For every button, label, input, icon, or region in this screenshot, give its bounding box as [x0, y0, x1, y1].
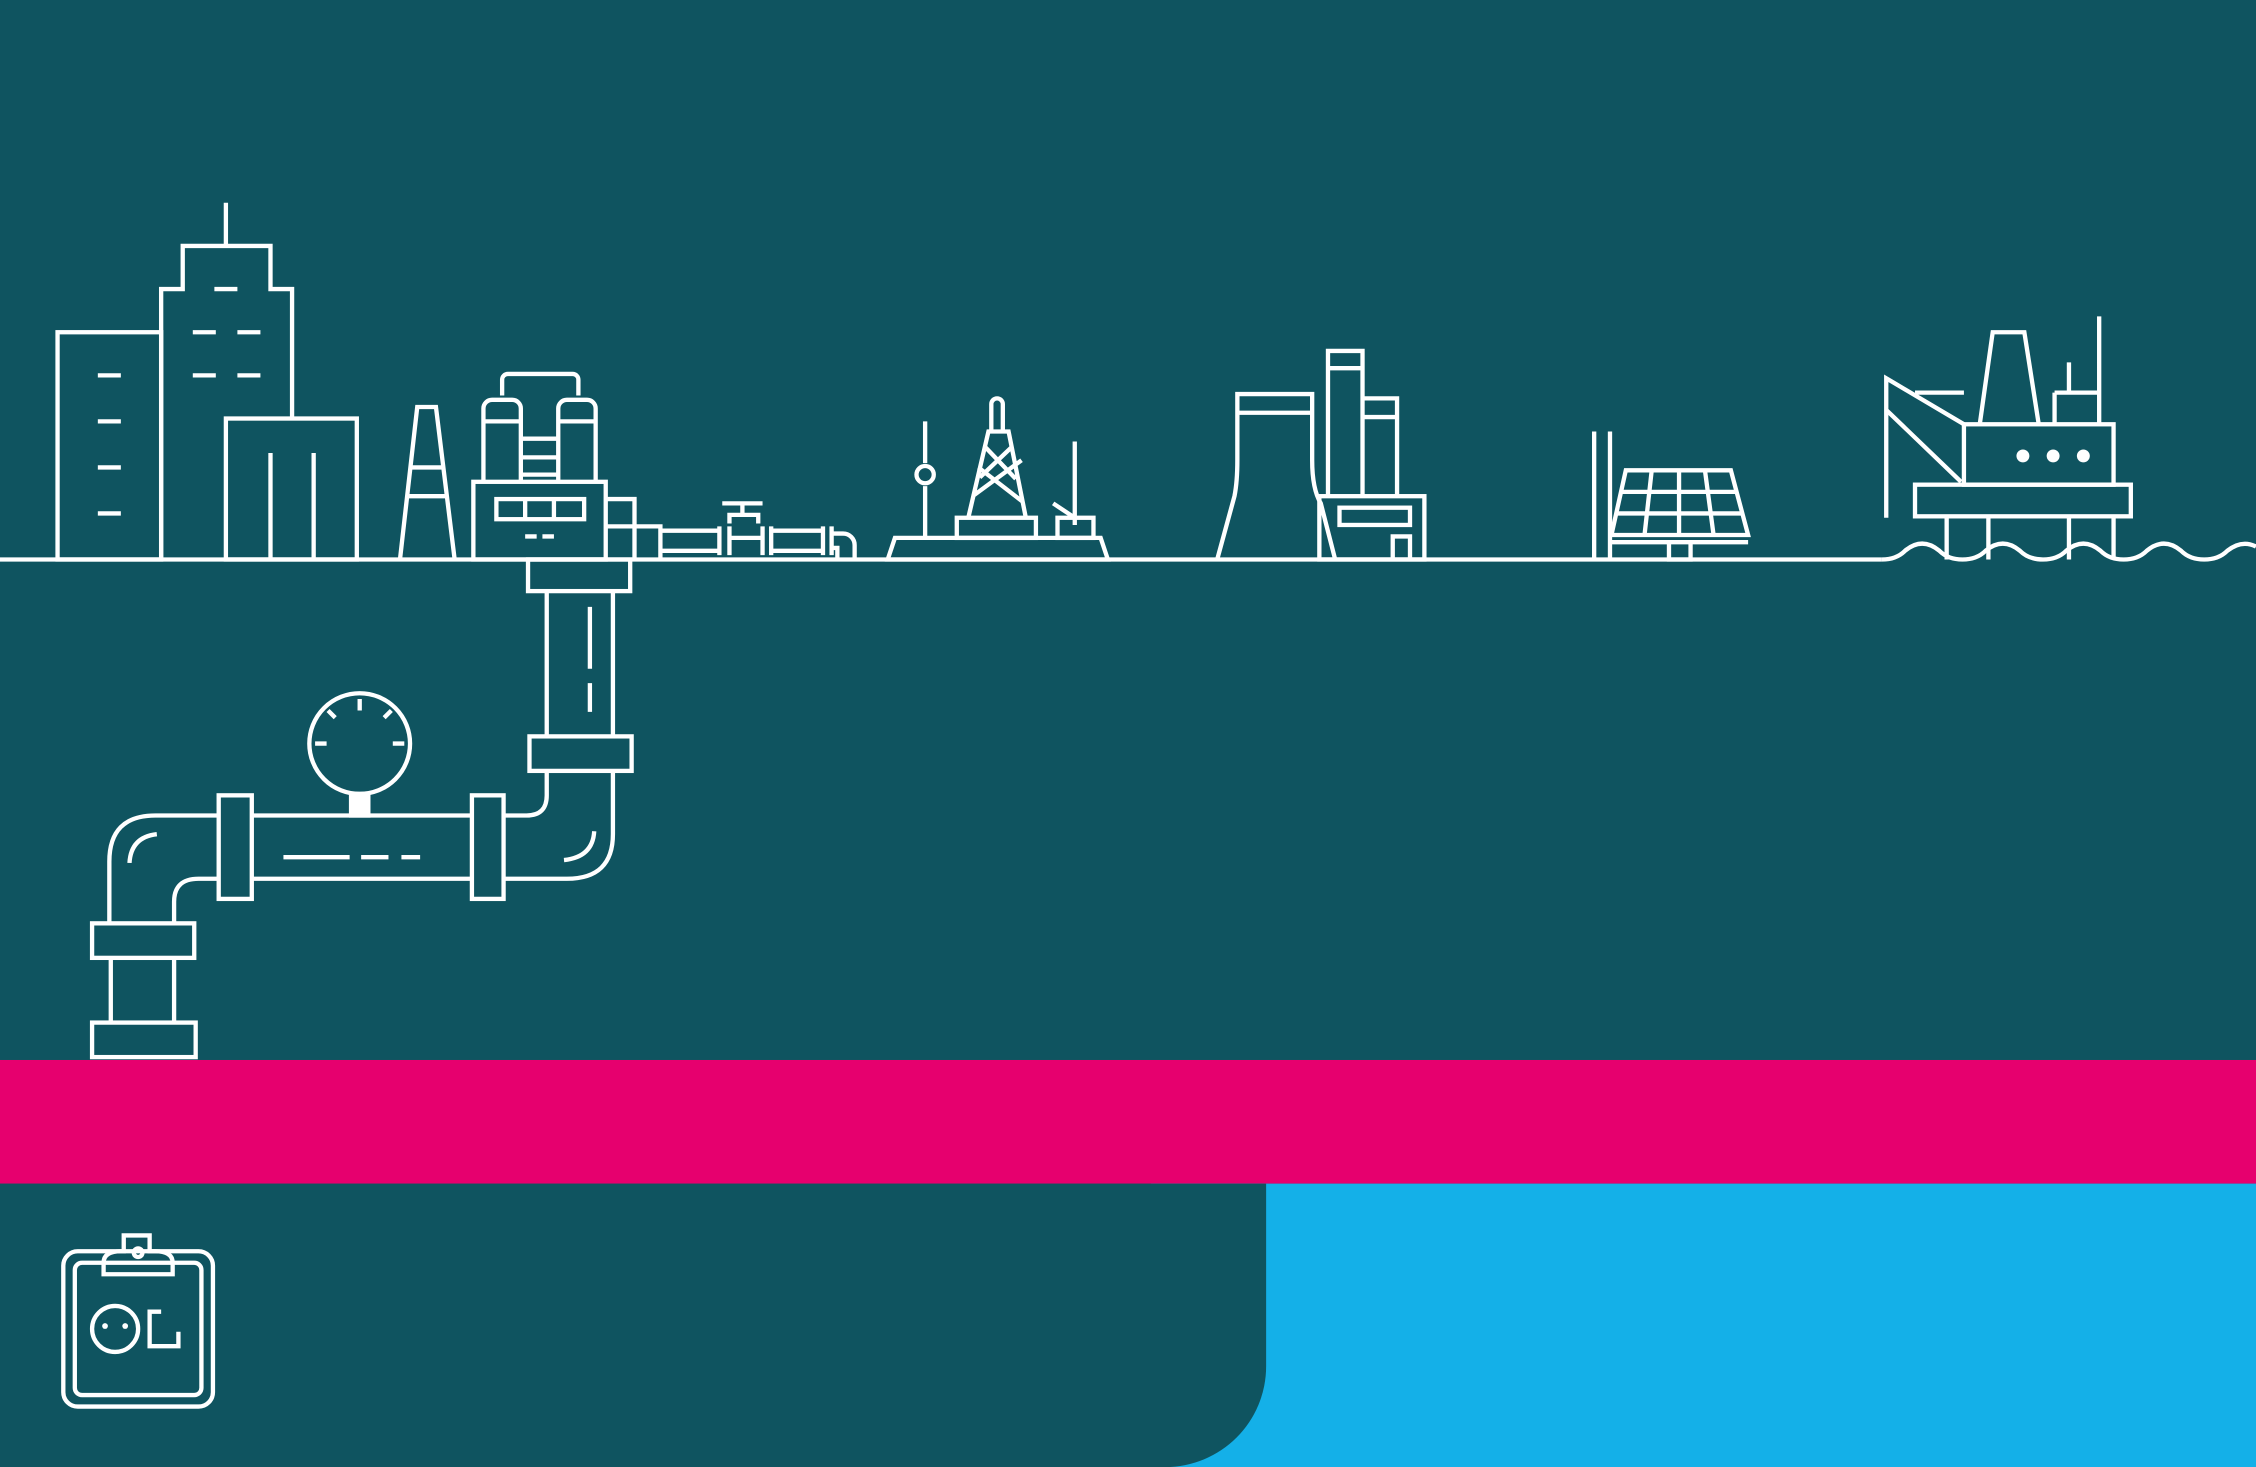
refinery	[473, 374, 855, 559]
oil rig	[888, 398, 1108, 559]
solar panel	[1594, 431, 1748, 559]
offshore platform	[1882, 316, 2256, 559]
blue panel	[1151, 1184, 2256, 1467]
power plant	[1217, 351, 1424, 559]
building 2	[161, 203, 292, 559]
pink band	[0, 1060, 2256, 1184]
skyline illustration	[0, 203, 2256, 559]
building 1	[58, 332, 161, 559]
tower	[400, 407, 455, 559]
icon: clipboard	[63, 1235, 213, 1407]
horizon line	[0, 558, 1882, 561]
teal panel with rounded corner	[0, 1184, 1266, 1467]
building 3	[226, 419, 357, 559]
underground pipe	[92, 559, 632, 1057]
dots on offshore building	[2016, 449, 2090, 462]
